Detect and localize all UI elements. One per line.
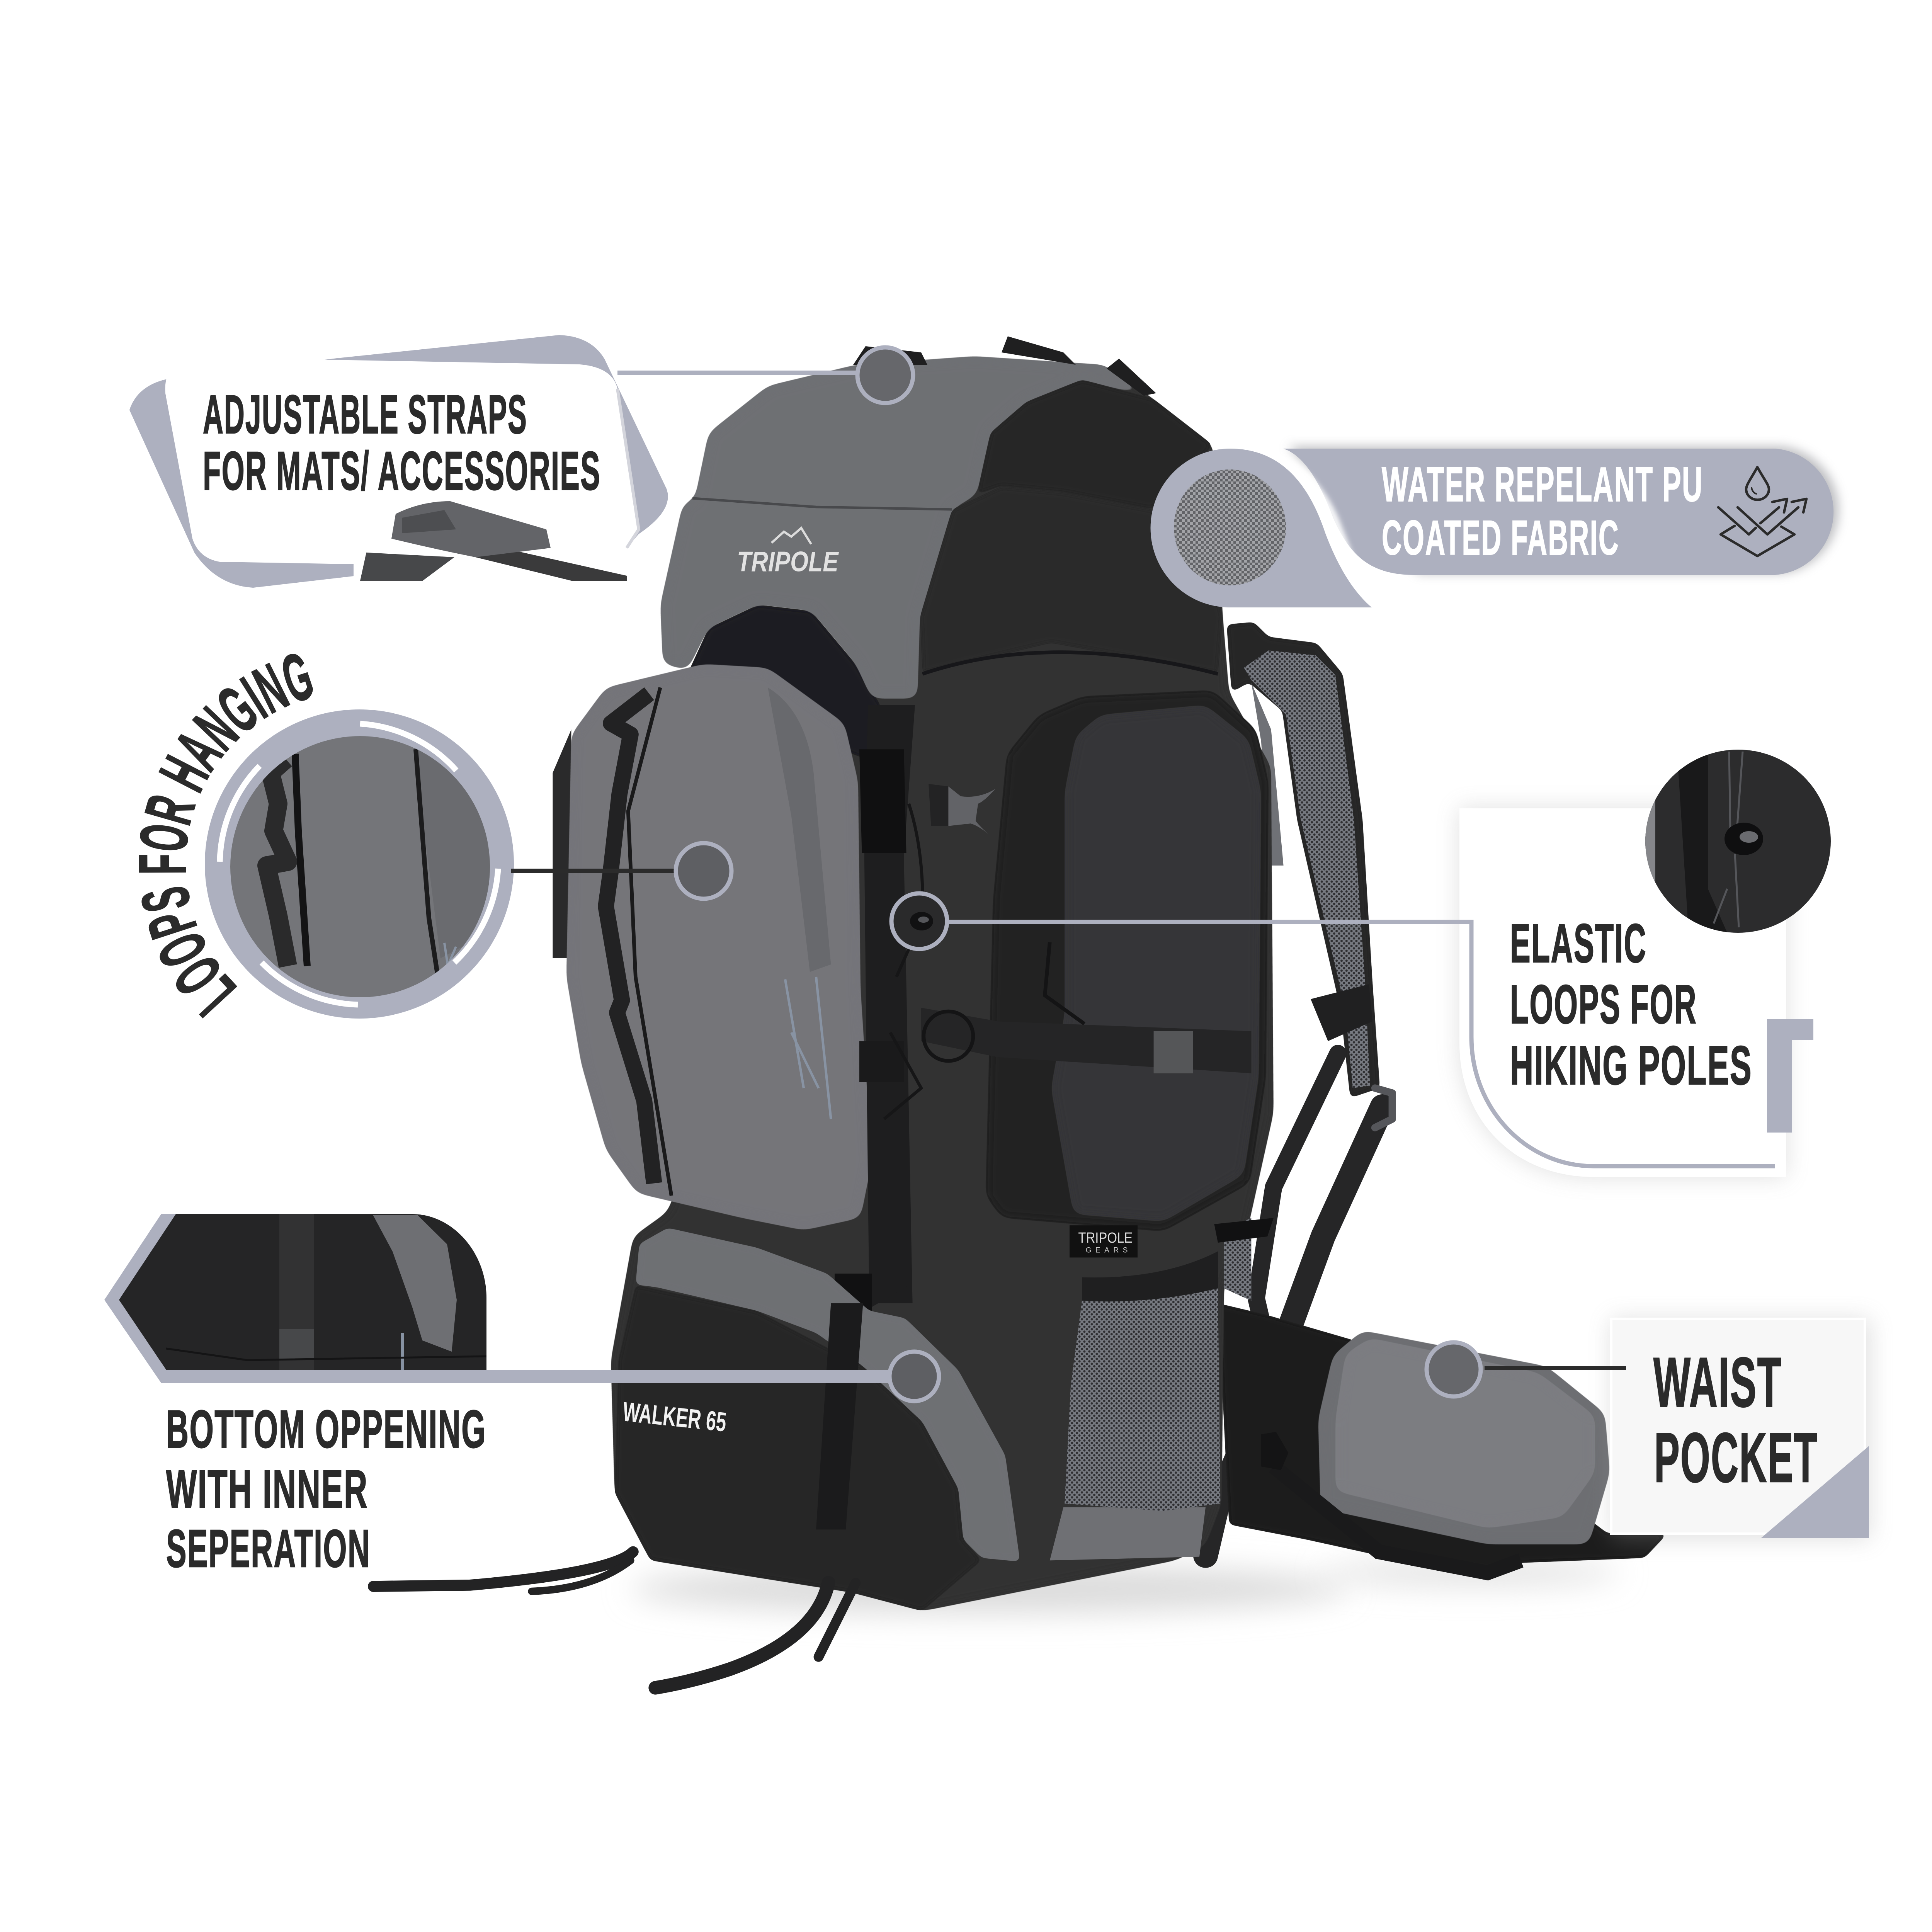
brand tag: TRIPOLE xyxy=(1078,1230,1133,1246)
top lid black xyxy=(977,379,1213,509)
main body xyxy=(611,359,1274,1611)
curved heading: LOOPS FOR HANGING xyxy=(125,638,321,1029)
card xyxy=(1611,1319,1865,1534)
tie-down strap on pocket xyxy=(921,1008,1251,1073)
hip buckle xyxy=(1261,1432,1288,1470)
right pocket xyxy=(985,690,1269,1231)
lid buckles on top xyxy=(853,336,1156,396)
connector line xyxy=(511,869,681,873)
marker: elastic loops xyxy=(891,893,947,949)
backpack photo xyxy=(373,336,1668,1688)
fabric swatch xyxy=(1174,469,1286,585)
card shadow xyxy=(1459,808,1786,1177)
mesh back panel glimpse xyxy=(1224,1218,1251,1301)
ground shadow xyxy=(631,1560,1620,1614)
seam right upper body xyxy=(922,652,1218,674)
heading text: ELASTIC xyxy=(1510,913,1647,974)
hip belt xyxy=(1218,1303,1668,1570)
callout: loops for hanging xyxy=(139,654,674,1019)
side buckle xyxy=(1214,1218,1274,1243)
card xyxy=(1459,808,1786,1177)
icon: strap buckle photo xyxy=(360,501,627,581)
upper right dark panel xyxy=(920,486,1223,674)
lower harness straps xyxy=(1206,1053,1392,1556)
shoulder strap with mesh xyxy=(1226,622,1380,1098)
heading text line 2: COATED FABRIC xyxy=(1382,510,1619,565)
logo: Tripole xyxy=(737,528,839,577)
marker: loops xyxy=(676,843,731,899)
swatch teardrop shape xyxy=(1151,449,1372,607)
callout backing shape xyxy=(129,335,668,588)
marker: bottom opening xyxy=(889,1352,939,1401)
left gray pocket xyxy=(553,664,872,1230)
triangle accent xyxy=(1761,1446,1869,1538)
elastic loop photo xyxy=(1645,750,1832,933)
marker: waist pocket xyxy=(1427,1342,1481,1396)
bracket accent xyxy=(1767,1019,1813,1133)
callout: waist pocket xyxy=(1485,1319,1870,1539)
shadow sliver xyxy=(1248,449,1374,607)
bottom black pocket xyxy=(614,1285,982,1611)
heading text: BOTTOM OPPENING xyxy=(166,1400,486,1459)
label: Walker 65: WALKER 65 xyxy=(621,1396,728,1437)
callout: elastic loops xyxy=(947,750,1832,1177)
callout: adjustable straps xyxy=(129,335,861,588)
zoomed photo of loops xyxy=(230,736,498,998)
bottom strap redraw xyxy=(816,1303,863,1529)
heading text line 2: WITH INNER xyxy=(166,1459,368,1519)
pill shadow xyxy=(1288,447,1838,573)
lid seam xyxy=(692,498,952,509)
frame and band xyxy=(104,1214,890,1383)
mesh side pocket xyxy=(1050,1251,1220,1560)
dark arch below logo xyxy=(687,605,885,767)
card shadow xyxy=(1611,1319,1870,1539)
heading text: WATER REPELANT PU xyxy=(1382,457,1703,512)
zoomed photo of bottom opening xyxy=(116,1214,487,1370)
connector line xyxy=(617,371,861,375)
white arc accents xyxy=(220,724,498,1005)
icon: water drop and layers xyxy=(1718,467,1806,556)
brand tag xyxy=(1070,1225,1138,1257)
waist pocket xyxy=(1318,1330,1610,1544)
bottom gray arc xyxy=(636,1228,1020,1562)
compression strap tails xyxy=(373,1552,855,1688)
connector line xyxy=(1485,1366,1626,1370)
white bubble xyxy=(165,357,639,581)
side release buckle xyxy=(929,784,995,836)
connector line xyxy=(947,922,1775,1166)
callout: water repellent fabric xyxy=(1151,447,1838,607)
ring xyxy=(205,709,514,1019)
harness strap over belt xyxy=(1274,1466,1521,1573)
heading text: WAIST xyxy=(1653,1343,1782,1422)
marker: straps xyxy=(857,347,913,403)
heading text line 3: SEPERATION xyxy=(166,1519,371,1578)
top lid gray xyxy=(660,356,1152,699)
logo: Tripole: TRIPOLE xyxy=(737,545,839,577)
pill shape xyxy=(1283,449,1833,575)
pole loop cords xyxy=(884,804,923,1119)
callout: bottom opening xyxy=(104,1214,890,1578)
center vertical strap xyxy=(816,705,915,1589)
heading text: ADJUSTABLE STRAPS xyxy=(203,384,527,445)
heading text line 2: LOOPS FOR xyxy=(1510,974,1697,1035)
heading text line 3: HIKING POLES xyxy=(1510,1035,1752,1096)
heading text line 2: FOR MATS/ ACCESSORIES xyxy=(203,440,601,501)
brand tag: GEARS xyxy=(1086,1247,1128,1255)
